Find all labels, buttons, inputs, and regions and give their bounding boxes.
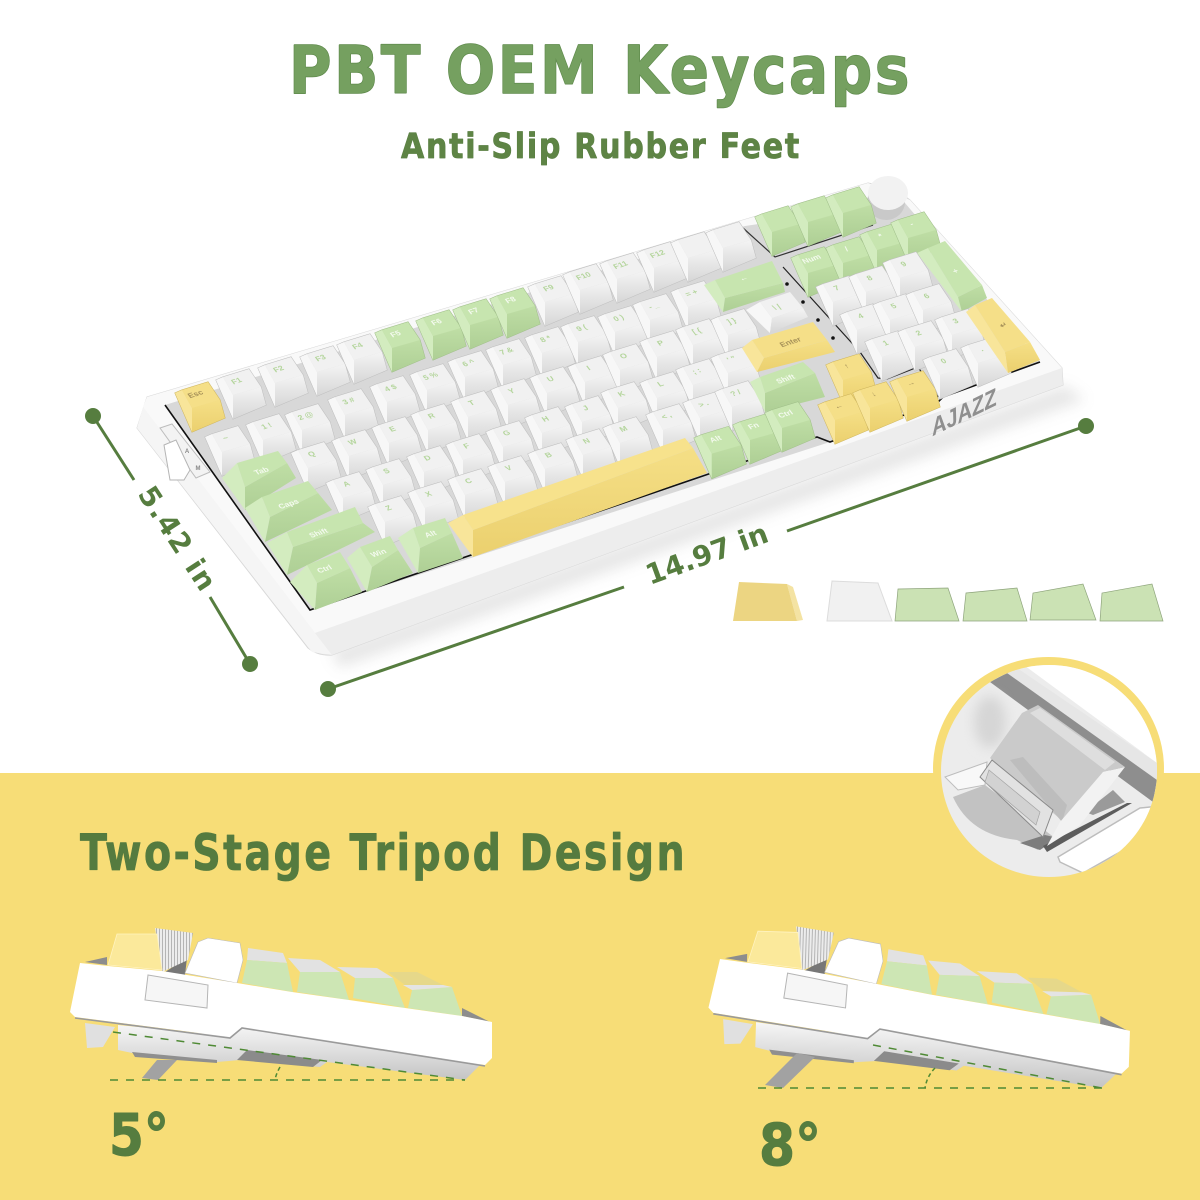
key legends: white keys: G bbox=[501, 429, 512, 438]
key legends: yellow keys bbox=[186, 321, 1009, 411]
key legends: yellow keys: ← bbox=[832, 401, 845, 411]
keycap profile swatches bbox=[733, 581, 1163, 621]
home row keys bbox=[245, 322, 835, 542]
key legends: white keys: 6 ^ bbox=[460, 358, 477, 368]
function row keys bbox=[175, 222, 756, 432]
key legends: white keys: A bbox=[341, 480, 352, 488]
key legends: white keys: ~ bbox=[221, 434, 231, 442]
key legends: white keys: X bbox=[423, 490, 434, 498]
key legends: white keys: L bbox=[656, 380, 666, 388]
section heading: Two-Stage Tripod Design bbox=[80, 824, 687, 882]
width dimension: 5.42 in: 5.42 in bbox=[131, 480, 223, 597]
key legends: green keys: ← bbox=[737, 273, 750, 283]
swatch: green keycap 4 bbox=[1100, 584, 1163, 621]
subtitle: Anti-Slip Rubber Feet bbox=[401, 127, 801, 167]
side switch: A bbox=[185, 449, 190, 455]
key legends: white keys: R bbox=[426, 412, 437, 420]
key legends: white keys bbox=[221, 248, 985, 512]
key legends: white keys: . bbox=[978, 345, 985, 353]
key legends: white keys: 1 bbox=[881, 339, 891, 347]
key legends: white keys: 3 # bbox=[340, 396, 357, 406]
key legends: white keys: O bbox=[618, 352, 629, 361]
key legends: white keys: [ { bbox=[690, 326, 703, 336]
number row keys bbox=[205, 261, 785, 476]
key legends: green keys: Shift bbox=[774, 373, 797, 385]
key legends: white keys: 2 bbox=[914, 329, 924, 337]
key legends: white keys: \ | bbox=[771, 303, 782, 312]
key legends: yellow keys: ↓ bbox=[869, 390, 878, 398]
key legends: white keys: F9 bbox=[541, 283, 556, 293]
key legends: white keys: F10 bbox=[574, 270, 593, 282]
swatch: yellow keycap bbox=[733, 582, 803, 621]
key legends: green keys: F8 bbox=[503, 295, 518, 305]
key legends: green keys: Alt bbox=[708, 434, 724, 444]
key legends: green keys: Ctrl bbox=[776, 408, 795, 420]
key legends: green keys: Caps bbox=[276, 497, 301, 511]
key legends: white keys: Q bbox=[306, 450, 317, 459]
keyboard shadow bbox=[330, 385, 1085, 668]
angle label 5 degrees: 5° bbox=[109, 1101, 169, 1169]
arrow keys bbox=[818, 371, 940, 444]
key legends: green keys: F7 bbox=[466, 306, 481, 316]
swatch: white keycap bbox=[827, 581, 892, 621]
keyboard top view bbox=[137, 176, 1085, 668]
title: PBT OEM Keycaps bbox=[289, 32, 912, 109]
length dimension: 14.97 in: 14.97 in bbox=[641, 517, 773, 592]
key legends: white keys: = + bbox=[683, 288, 700, 298]
key legends: white keys: C bbox=[463, 477, 474, 485]
key legends: white keys: F bbox=[462, 442, 472, 450]
key legends: white keys: - _ bbox=[646, 301, 661, 311]
tripod close-up circle bbox=[933, 657, 1170, 880]
support leg 5 degrees bbox=[142, 1060, 177, 1080]
arrow up key bbox=[826, 354, 876, 404]
key legends: white keys: S bbox=[381, 467, 392, 475]
keyboard side drawing bbox=[70, 928, 492, 1080]
key legends: green keys bbox=[252, 220, 961, 575]
key legends: white keys: I bbox=[585, 364, 592, 372]
key legends: green keys: / bbox=[843, 245, 851, 253]
key legends: white keys: D bbox=[422, 454, 433, 462]
key legends: white keys: ] } bbox=[725, 316, 738, 326]
key legends: white keys: 1 ! bbox=[259, 421, 274, 431]
key legends: green keys: * bbox=[876, 232, 886, 240]
key legends: green keys: Ctrl bbox=[315, 563, 334, 575]
side switch bbox=[160, 424, 210, 480]
key legends: white keys: W bbox=[346, 437, 359, 447]
key legends: white keys: K bbox=[616, 390, 627, 398]
lower row keys bbox=[267, 362, 825, 575]
support leg 8 degrees bbox=[765, 1053, 815, 1088]
length dimension: 14.97 in bbox=[320, 418, 1094, 697]
key legends: white keys: 4 $ bbox=[382, 383, 399, 393]
key legends: white keys: M bbox=[618, 424, 630, 434]
key legends: white keys: V bbox=[503, 464, 514, 472]
key legends: white keys: F2 bbox=[271, 364, 286, 374]
key legends: green keys: - bbox=[908, 220, 916, 228]
key legends: white keys: Y bbox=[506, 387, 517, 395]
key legends: white keys: 7 bbox=[832, 284, 842, 292]
key legends: white keys: ? / bbox=[728, 388, 744, 398]
QWERTY row keys bbox=[222, 292, 808, 510]
key legends: yellow keys: ↵ bbox=[998, 321, 1009, 330]
key legends: yellow keys: ↑ bbox=[842, 362, 851, 370]
key legends: green keys: Win bbox=[369, 547, 388, 559]
knob bbox=[867, 176, 908, 220]
key legends: white keys: ' " bbox=[725, 354, 738, 364]
keyboard chassis bbox=[137, 183, 1063, 655]
key legends: white keys: 8 * bbox=[538, 334, 554, 344]
key legends: white keys: F12 bbox=[648, 248, 667, 260]
key legends: white keys: E bbox=[387, 425, 398, 433]
key legends: white keys: N bbox=[581, 437, 592, 445]
angle label 8 degrees: 8° bbox=[759, 1111, 821, 1179]
key legends: white keys: 0 bbox=[939, 357, 949, 365]
key legends: white keys: H bbox=[540, 415, 551, 423]
width dimension: 5.42 in bbox=[85, 408, 258, 672]
key legends: yellow keys: Esc bbox=[186, 388, 206, 400]
yellow lower band bbox=[0, 773, 1200, 1200]
key legends: white keys: F1 bbox=[229, 376, 244, 386]
swatch: green keycap 1 bbox=[895, 588, 959, 621]
key legends: yellow keys: → bbox=[904, 378, 917, 388]
key well plate bbox=[165, 203, 1040, 610]
key legends: white keys: 0 ) bbox=[611, 313, 626, 323]
side switch: M bbox=[196, 466, 200, 472]
key legends: white keys: 6 bbox=[922, 292, 932, 300]
key legends: green keys: Tab bbox=[252, 465, 271, 477]
key legends: white keys: 9 ( bbox=[574, 323, 589, 333]
key legends: white keys: 2 @ bbox=[296, 410, 315, 422]
key legends: white keys: 5 % bbox=[421, 370, 440, 382]
swatch: green keycap 2 bbox=[963, 588, 1027, 621]
key legends: white keys: F3 bbox=[313, 353, 328, 363]
side view at 5 degrees bbox=[70, 928, 492, 1169]
key legends: white keys: 7 & bbox=[498, 346, 515, 357]
key legends: white keys: 3 bbox=[951, 317, 961, 325]
keyboard side drawing bbox=[706, 924, 1133, 1089]
bottom row keys bbox=[290, 402, 815, 610]
key legends: white keys: T bbox=[467, 399, 477, 407]
numpad keys bbox=[755, 187, 1040, 399]
angle guides 5 degrees bbox=[110, 1032, 465, 1080]
key legends: green keys: Num bbox=[800, 253, 823, 265]
angle guides 8 degrees bbox=[758, 1045, 1102, 1088]
key legends: green keys: F6 bbox=[429, 317, 444, 327]
key legends: white keys: P bbox=[655, 339, 666, 347]
key legends: white keys: 5 bbox=[889, 302, 899, 310]
key legends: white keys: > . bbox=[696, 399, 711, 409]
key legends: white keys: B bbox=[543, 451, 554, 459]
side view at 8 degrees bbox=[706, 924, 1133, 1179]
key legends: green keys: Fn bbox=[746, 421, 761, 431]
key legends: green keys: Alt bbox=[423, 529, 439, 539]
key legends: green keys: F5 bbox=[388, 329, 403, 339]
brand logo: AJAZZ bbox=[928, 383, 1000, 441]
key legends: green keys: + bbox=[951, 267, 961, 275]
swatch: green keycap 3 bbox=[1030, 584, 1096, 620]
key legends: white keys: U bbox=[545, 375, 556, 383]
key legends: white keys: 4 bbox=[856, 312, 866, 320]
key legends: white keys: 8 bbox=[865, 274, 875, 282]
key legends: white keys: J bbox=[581, 404, 590, 412]
key legends: white keys: F11 bbox=[611, 259, 630, 271]
key legends: green keys: Shift bbox=[307, 527, 330, 539]
key legends: white keys: ; : bbox=[690, 366, 703, 376]
key legends: white keys: Z bbox=[384, 504, 394, 512]
key legends: white keys: < , bbox=[659, 411, 674, 421]
key legends: yellow keys: Enter bbox=[778, 335, 803, 349]
key legends: white keys: F4 bbox=[350, 341, 365, 351]
key legends: white keys: 9 bbox=[899, 260, 909, 268]
